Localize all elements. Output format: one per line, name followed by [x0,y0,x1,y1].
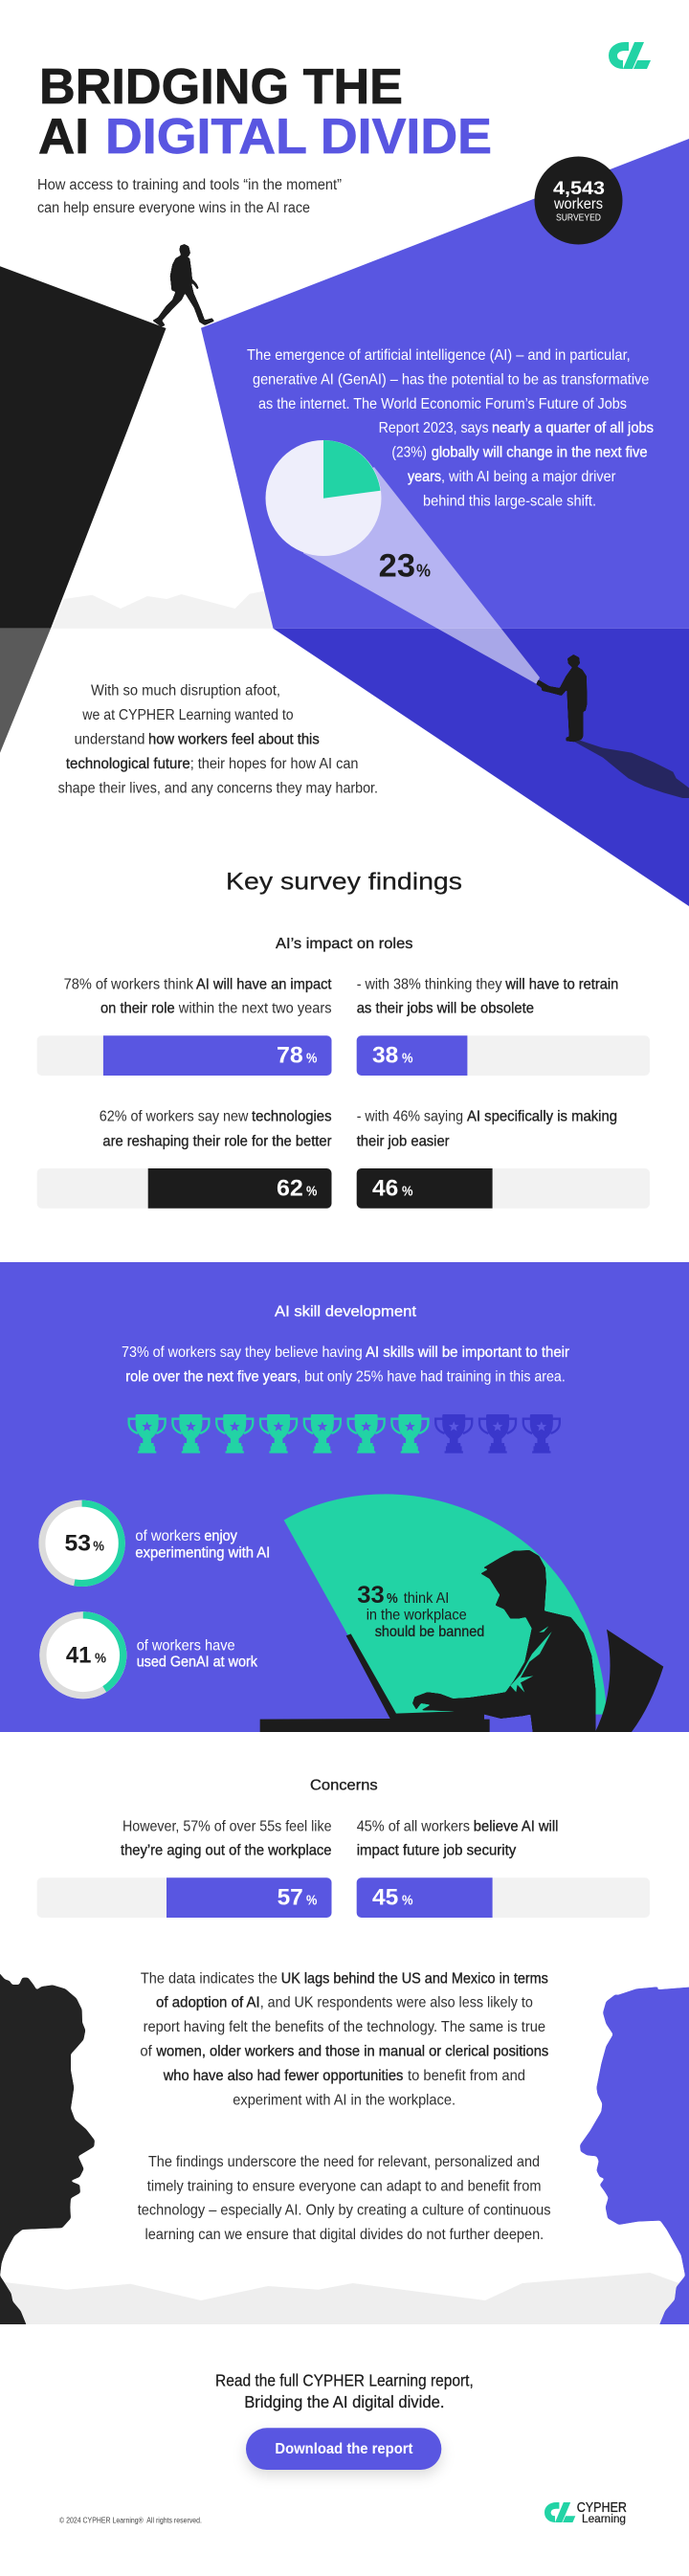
text block: UK adoption: UK lags behind the US and Mexico in terms [281,1970,548,1987]
text: 78%: 78% of workers think [64,976,194,992]
second intro paragraph: With so much disruption afoot, [91,683,280,700]
text: 46%: - with 46% saying [357,1109,463,1125]
text: 53% caption: experimenting with AI [135,1544,270,1561]
flashlight beam [303,467,540,684]
stat: 23%: 23 [379,548,415,585]
subtitle [37,177,342,216]
laptop [260,1633,490,1732]
workers surveyed badge: workers [553,196,603,212]
intro paragraph [247,347,654,509]
text: 41% caption [137,1637,258,1671]
title: BRIDGING THE [39,59,403,115]
subheading: AI skill development [275,1303,417,1320]
bar: 38%: 38 [372,1043,398,1069]
text: 45%: believe AI will [474,1818,558,1834]
subheading: AI’s impact on roles [276,936,413,952]
heading: key survey findings: Key survey findings [226,868,462,895]
cliff: left shadow [0,629,51,753]
text block: UK adoption: report having felt the benefits of the technology. The same is true [144,2019,545,2035]
bar: 57% [37,1877,331,1918]
bar: 62%: % [306,1183,317,1199]
bar: 57%: % [306,1893,317,1909]
title: AI [38,109,89,165]
call to action text [215,2370,474,2411]
second intro paragraph: shape their lives, and any concerns they may harbor. [58,781,378,796]
text: 41% caption: of workers have [137,1637,235,1654]
text block: UK adoption: experiment with AI in the workplace. [233,2092,456,2108]
text block: UK adoption: women, older workers and those in manual or clerical positions [155,2044,548,2059]
intro paragraph: The emergence of artificial intelligence (AI) – and in particular, [247,347,631,364]
logo: top right mark [612,42,651,69]
second intro paragraph: ; their hopes for how AI can [190,756,358,772]
second intro paragraph: technological future [66,756,190,772]
pie chart: 23% [266,440,381,556]
donut: 53%: 53 [65,1531,91,1557]
icon row: trophies 7 of 10 [129,1414,560,1454]
text block: UK adoption: , and UK respondents were also less likely to [260,1995,533,2011]
bar: 62%: 62 [277,1175,303,1201]
panel: AI's impact on roles [37,936,650,1209]
text: 57%: However, 57% of over 55s feel like [122,1818,332,1834]
bar: 38% [357,1035,650,1076]
text: 53% caption: enjoy [204,1528,237,1544]
text: 78%: AI will have an impact [196,976,332,992]
donut: 41% [39,1611,126,1699]
text: 53% caption [135,1528,270,1561]
text: 45% [357,1818,558,1859]
text: 45%: 45% of all workers [357,1818,470,1834]
bar: 46% [357,1168,650,1209]
text: 38% [357,976,618,1017]
text: 57%: they’re aging out of the workplace [121,1843,332,1859]
chair [595,1630,663,1732]
bar: 45% [357,1877,650,1918]
cliff: left black [0,266,167,629]
bar: 78%: 78 [277,1043,303,1069]
text: 62%: technologies [252,1109,331,1125]
text: 73%: role over the next five years [125,1368,297,1385]
text: 73%: AI skills will be important to their [366,1344,570,1361]
bar: 78%: % [306,1051,317,1067]
text block: UK adoption: of adoption of AI [156,1995,260,2011]
text: 78% [64,976,332,1017]
call to action text: Bridging the AI digital divide. [244,2392,444,2411]
text: 33%: 33 [357,1582,385,1609]
text: 38%: will have to retrain [504,976,618,992]
text: 46%: their job easier [357,1133,450,1149]
hero mountain backdrop [53,591,278,629]
icon: right head silhouette [580,1987,689,2338]
bar: 45%: 45 [372,1885,398,1911]
title [38,59,492,165]
text: 33%: % [387,1590,398,1607]
button: download the report [246,2428,441,2470]
intro paragraph: (23%) [391,445,427,461]
text block: findings: The findings underscore the need for relevant, personalized and [148,2154,540,2170]
logo: CYPHER Learning: CYPHER [577,2500,627,2516]
text: 33% [357,1582,484,1640]
illustration: man at laptop in green light [260,1494,663,1744]
text: 78%: on their role [100,1001,175,1017]
shirt highlights [510,1626,552,1693]
intro paragraph: Report 2023, says [379,420,489,436]
subtitle: can help ensure everyone wins in the AI race [37,200,310,216]
icon: man with flashlight [537,655,587,742]
text: 73%: 73% of workers say they believe having [122,1344,363,1361]
text: 73% [122,1344,570,1385]
panel: AI skill development [0,1262,689,1744]
icon: walking man [152,244,214,327]
title: DIGITAL DIVIDE [105,109,492,165]
background mountains [0,2273,689,2324]
text: 46% [357,1109,617,1149]
second intro paragraph: how workers feel about this [148,731,320,748]
text block: findings: technology – especially AI. Only by creating a culture of continuous [138,2203,551,2219]
text: 45%: impact future job security [357,1843,516,1859]
text: 38%: - with 38% thinking they [357,976,502,992]
text block: findings: learning can we ensure that digital divides do not further deepen. [145,2227,544,2243]
bar: 57%: 57 [278,1885,303,1911]
text: 57% [121,1818,332,1859]
second intro paragraph: understand [75,731,145,748]
icon: left head silhouette [0,1966,95,2338]
text: 46%: AI specifically is making [467,1109,617,1125]
text: 73%: , but only 25% have had training in this area. [297,1368,566,1385]
bar: 38%: % [402,1051,413,1067]
text: 62%: are reshaping their role for the better [102,1133,332,1149]
text block: UK adoption: to benefit from and [408,2068,525,2084]
second intro paragraph [58,683,378,796]
text: 33%: think AI [404,1590,449,1607]
text: 33%: should be banned [375,1624,484,1640]
man [412,1550,596,1744]
copyright: © 2024 CYPHER Learning® All rights reserved. [59,2517,202,2525]
subtitle: How access to training and tools “in the moment” [37,177,342,193]
workers surveyed badge: 4,543 [553,178,605,199]
workers surveyed badge [534,157,622,245]
panel: concerns [37,1778,650,1918]
bar: 62% [37,1168,331,1209]
text block: UK adoption: who have also had fewer opportunities [163,2068,403,2084]
intro paragraph: , with AI being a major driver [441,469,616,485]
text: 38%: as their jobs will be obsolete [357,1001,534,1017]
second intro paragraph: we at CYPHER Learning wanted to [81,707,294,723]
intro paragraph: generative AI (GenAI) – has the potential to be as transformative [253,371,649,388]
text: 41% caption: used GenAI at work [137,1654,258,1671]
text block: UK adoption: The data indicates the [141,1970,278,1987]
donut: 53%: % [93,1539,104,1555]
button: download the report: Download the report [275,2441,413,2457]
intro paragraph: globally will change in the next five [432,445,648,461]
text: 78%: within the next two years [178,1001,331,1017]
donut: 53% [39,1500,125,1587]
logo: CYPHER Learning: Learning [582,2514,626,2525]
intro paragraph: years [408,469,441,485]
bar: 46%: 46 [372,1175,398,1201]
text: 53% caption: of workers [135,1528,201,1544]
text: 62%: 62% of workers say new [100,1109,249,1125]
light fan [284,1494,607,1715]
text block: findings [138,2154,551,2243]
cliff: right dark blue [274,629,689,906]
logo: CYPHER Learning [547,2500,627,2525]
subheading: Concerns [310,1778,378,1794]
bar: 45%: % [402,1893,413,1909]
call to action text: Read the full CYPHER Learning report, [215,2370,474,2389]
donut: 41%: 41 [66,1642,92,1668]
text: 33%: in the workplace [367,1608,467,1624]
intro paragraph: nearly a quarter of all jobs [492,420,654,436]
donut: 41%: % [95,1650,106,1666]
shadow of flashlight man [574,740,689,798]
text block: UK adoption: of [140,2044,152,2059]
bar: 46%: % [402,1183,413,1199]
text block: UK adoption [140,1970,548,2108]
stat: 23%: % [416,562,431,581]
cliff: right purple [201,139,689,629]
text: 62% [100,1109,332,1149]
bar: 78% [37,1035,331,1076]
text block: findings: timely training to ensure everyone can adapt to and benefit from [147,2178,542,2194]
workers surveyed badge: SURVEYED [556,212,601,224]
intro paragraph: behind this large-scale shift. [423,493,596,509]
intro paragraph: as the internet. The World Economic Forum’s Future of Jobs [258,396,627,412]
stat: 23% [379,548,431,585]
